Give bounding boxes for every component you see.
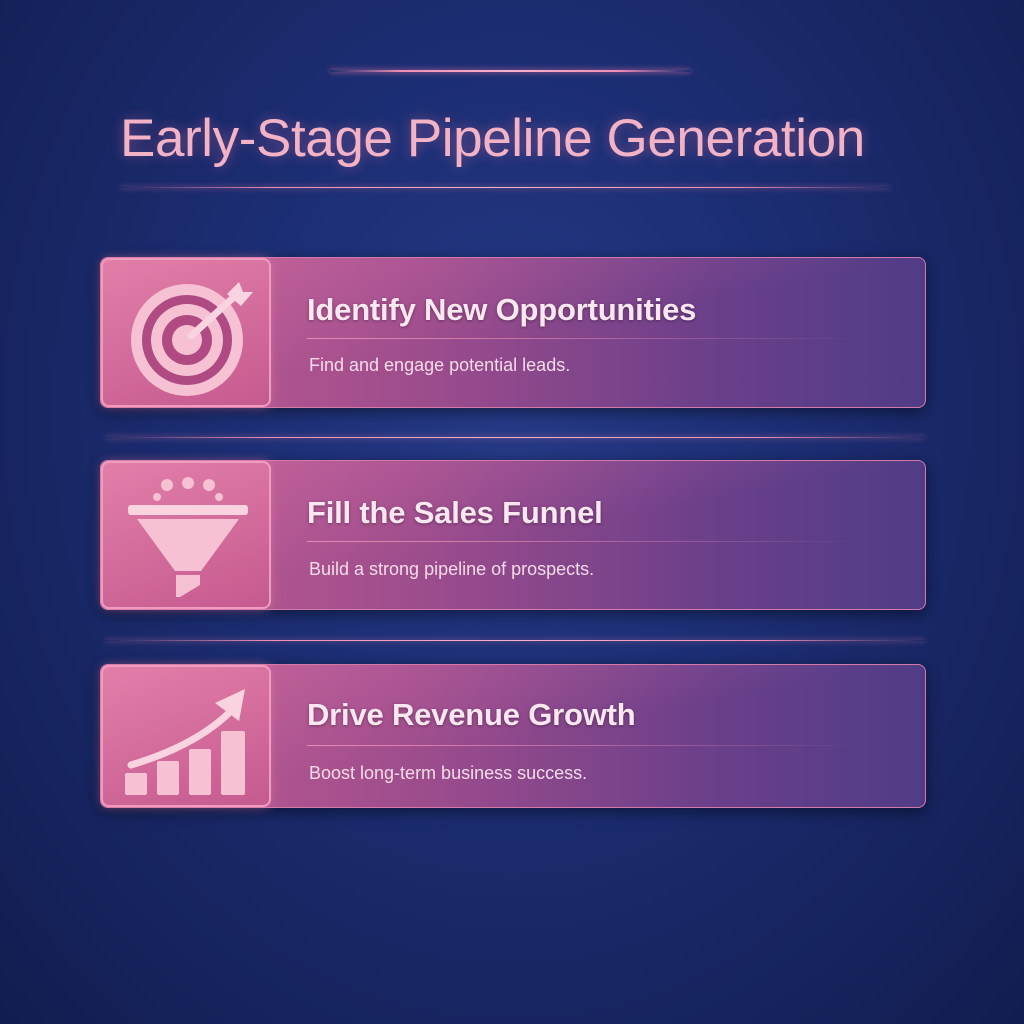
top glow line — [330, 70, 690, 72]
text: Boost long-term business success. — [309, 763, 587, 783]
heading: Drive Revenue Growth — [307, 697, 635, 732]
title: Early-Stage Pipeline Generation — [120, 109, 865, 168]
title underline — [120, 187, 890, 188]
icon: funnel — [101, 461, 271, 609]
heading: Identify New Opportunities — [307, 292, 696, 327]
heading: Fill the Sales Funnel — [307, 495, 603, 530]
panel: identify new opportunities — [100, 257, 926, 408]
icon: target — [101, 258, 271, 407]
text: Find and engage potential leads. — [309, 355, 570, 375]
panel: fill the sales funnel — [100, 460, 926, 610]
text: Build a strong pipeline of prospects. — [309, 559, 594, 579]
panel: drive revenue growth — [100, 664, 926, 808]
icon: growth chart — [101, 665, 271, 807]
